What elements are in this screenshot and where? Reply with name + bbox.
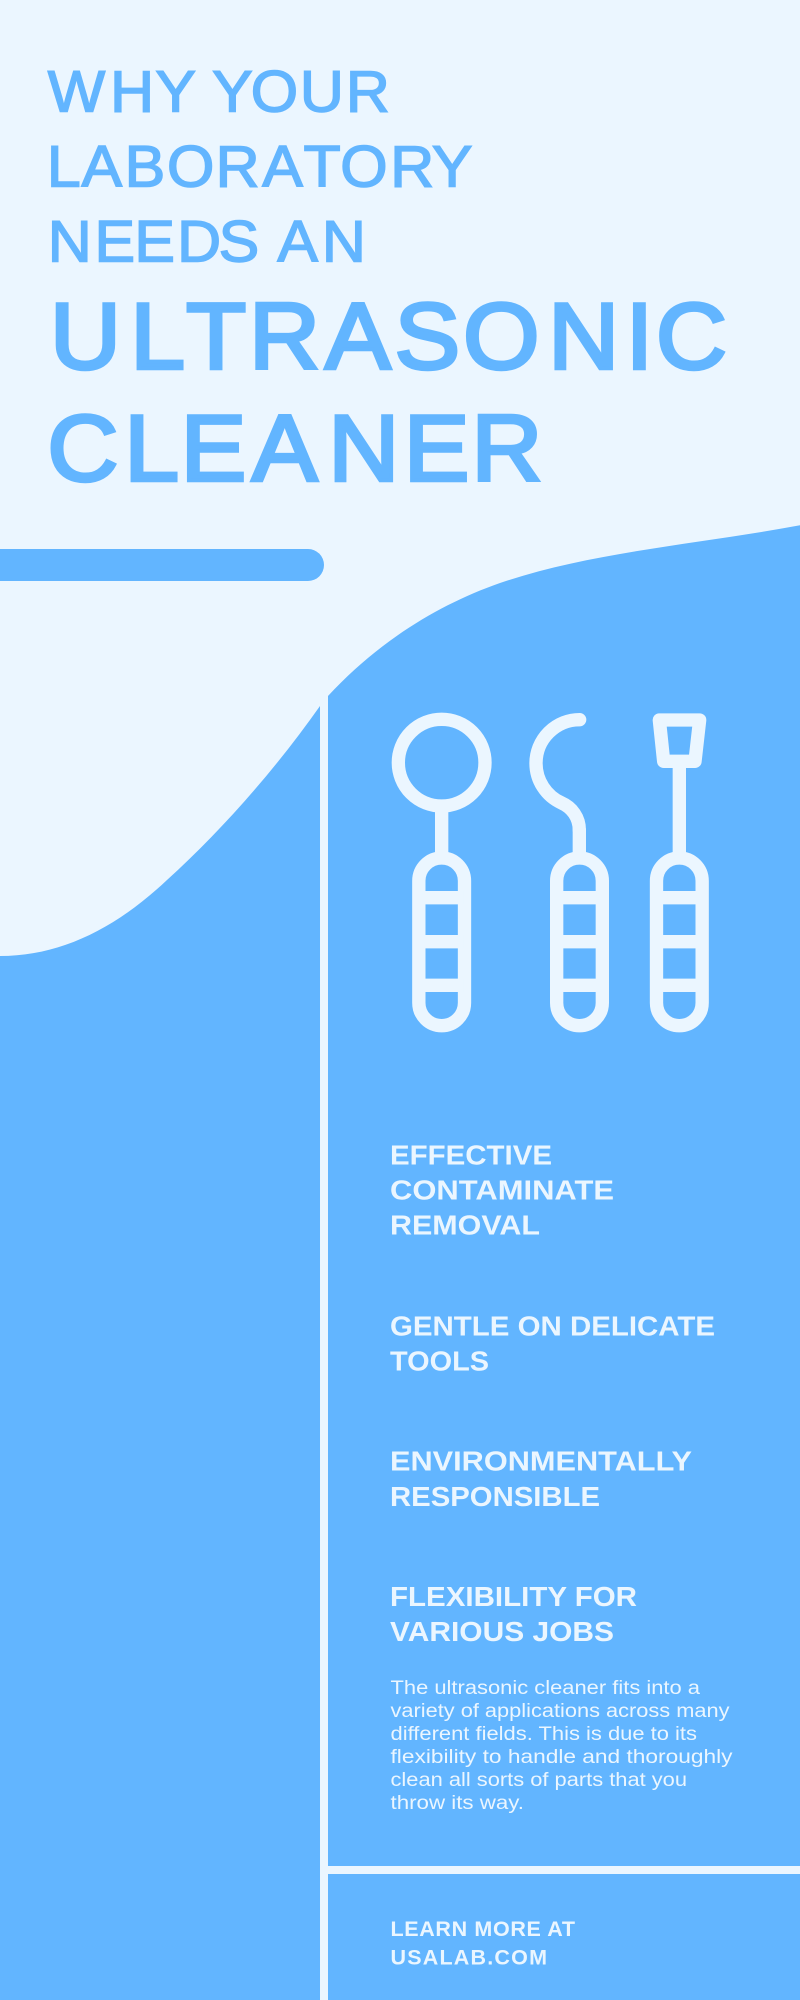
icon: mirror [398, 719, 485, 1026]
heading: gentle on delicate tools [390, 1310, 715, 1376]
body text: clean all sorts of parts that you [390, 1770, 687, 1791]
heading: effective contaminate removal: CONTAMINATE [390, 1174, 614, 1206]
title line: laboratory: LABORATORY [47, 134, 472, 199]
body text: variety of applications across many [390, 1701, 730, 1722]
footer call to action [390, 1917, 575, 1970]
body text: flexibility to handle and thoroughly [390, 1747, 733, 1768]
accent bar [0, 549, 324, 581]
body text: The ultrasonic cleaner fits into a [390, 1678, 700, 1699]
icon: hook probe [536, 720, 602, 1026]
title line: needs an: NEEDS AN [48, 209, 366, 274]
heading: gentle on delicate tools: TOOLS [390, 1346, 489, 1376]
body text: different fields. This is due to its [390, 1724, 697, 1745]
heading: gentle on delicate tools: GENTLE ON DELICATE [390, 1310, 715, 1341]
body text: throw its way. [390, 1793, 524, 1814]
heading: effective contaminate removal: REMOVAL [390, 1210, 540, 1240]
body text [390, 1678, 733, 1814]
title line: cleaner: CLEANER [47, 397, 542, 501]
vertical divider line [320, 696, 328, 2000]
title line: why your: WHY YOUR [48, 59, 390, 124]
footer call to action: USALAB.COM [390, 1946, 547, 1970]
heading: environmentally responsible: RESPONSIBLE [390, 1481, 600, 1512]
title [47, 59, 727, 501]
heading: flexibility for various jobs [390, 1581, 637, 1647]
heading: environmentally responsible: ENVIRONMENTALLY [390, 1446, 692, 1477]
icon: dental tools [398, 719, 702, 1026]
horizontal divider line [328, 1866, 800, 1874]
heading: flexibility for various jobs: VARIOUS JOBS [390, 1616, 614, 1647]
heading: flexibility for various jobs: FLEXIBILITY FOR [390, 1581, 637, 1612]
heading: effective contaminate removal: EFFECTIVE [390, 1140, 552, 1171]
icon: spatula [656, 720, 702, 1026]
heading: environmentally responsible [390, 1446, 692, 1512]
footer call to action: LEARN MORE AT [390, 1917, 575, 1941]
heading: effective contaminate removal [390, 1140, 614, 1240]
list headings [390, 1140, 715, 1647]
blue wave panel [0, 525, 800, 2000]
title line: ultrasonic: ULTRASONIC [50, 285, 727, 389]
